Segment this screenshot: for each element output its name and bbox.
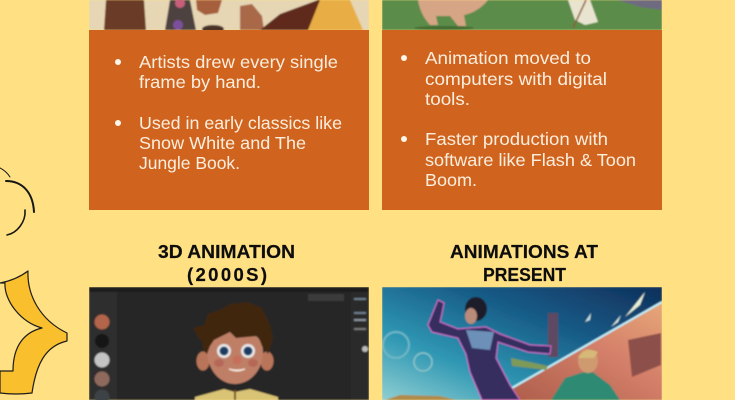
heading: 3D animation: (2000S) — [187, 264, 267, 285]
decoration: cloud outline — [0, 168, 34, 235]
heroine — [428, 297, 551, 400]
character — [193, 302, 278, 400]
bullet list: hand-drawn: Artists drew every single — [139, 52, 338, 72]
bullet list: hand-drawn: frame by hand. — [139, 72, 261, 92]
bullet list: digital: software like Flash & Toon — [425, 150, 636, 170]
image: hand-drawn animation still — [89, 0, 369, 33]
heading: animations at present: PRESENT — [483, 264, 567, 285]
heading: 3D animation — [158, 241, 295, 285]
panel: hand-drawn animation — [89, 30, 369, 210]
heading: 3D animation: 3D ANIMATION — [158, 241, 295, 262]
bullet list: hand-drawn: Jungle Book. — [139, 153, 240, 173]
heading: animations at present: ANIMATIONS AT — [450, 241, 599, 262]
bullet list: digital: computers with digital — [425, 69, 607, 89]
bullet list: digital: tools. — [425, 89, 470, 109]
panel: digital animation — [382, 30, 662, 210]
bullet list: hand-drawn: Snow White and The — [139, 133, 306, 153]
second hero — [551, 349, 620, 400]
bullet list: hand-drawn: Used in early classics like — [139, 113, 342, 133]
decoration: yellow star — [0, 271, 67, 394]
bullet list: digital: Faster production with — [425, 129, 608, 149]
heading: animations at present — [450, 241, 599, 285]
bullet list: hand-drawn — [115, 52, 342, 173]
bullet list: digital — [401, 48, 636, 190]
image: digital animation still — [382, 0, 662, 30]
bullet list: digital: Animation moved to — [425, 48, 591, 68]
image: modern animation still — [382, 287, 662, 400]
image: 3D character in software — [89, 287, 369, 400]
bullet list: digital: Boom. — [425, 170, 477, 190]
